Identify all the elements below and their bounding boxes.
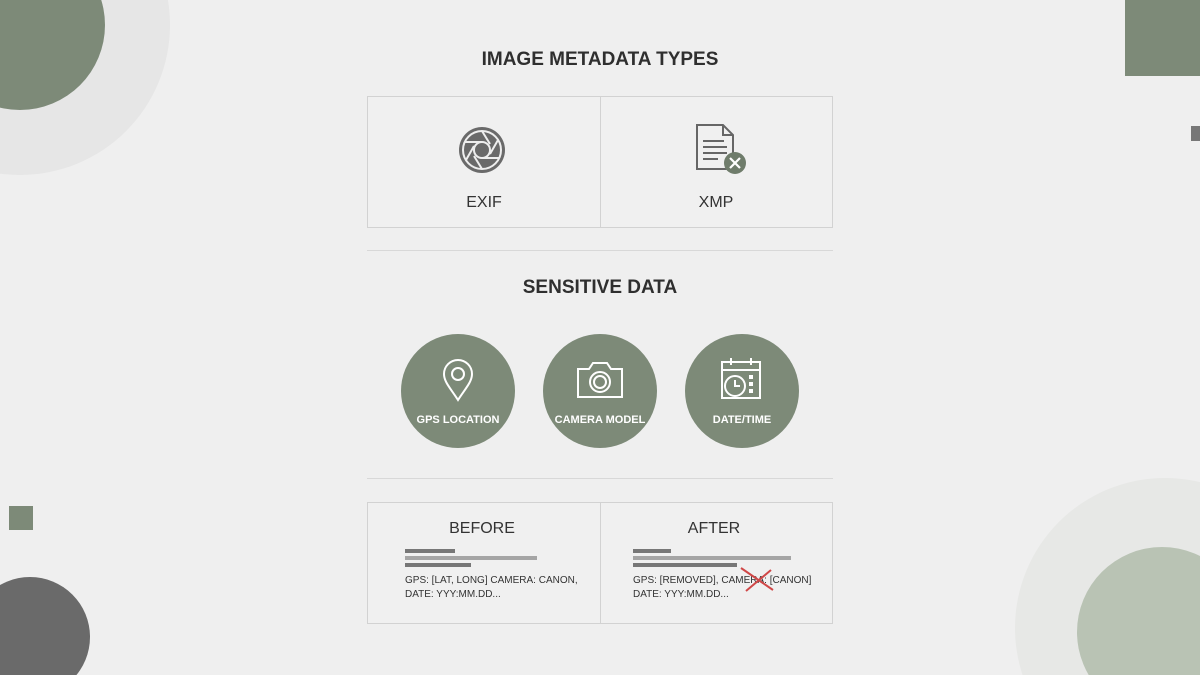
card: after: AFTER: [688, 520, 740, 537]
decoration: left green square: [9, 506, 33, 530]
card: EXIF: [368, 97, 601, 227]
icon circle: GPS location: GPS LOCATION: [417, 414, 499, 426]
card: before: BEFORE: [449, 520, 515, 537]
icon circle: date/time: DATE/TIME: [713, 414, 771, 426]
panel: before/after: [367, 502, 833, 624]
card: before: DATE: YYY:MM.DD...: [405, 589, 501, 600]
label: XMP: XMP: [699, 194, 733, 211]
icon circle: date/time: [685, 334, 799, 448]
decoration: bottom-right circle: [1077, 547, 1200, 675]
icon: document with x: [696, 124, 746, 174]
card: after: [633, 520, 811, 600]
icon circle: camera model: [543, 334, 657, 448]
card: before: [368, 503, 601, 623]
panel: metadata types: [367, 96, 833, 228]
card: XMP: [696, 124, 746, 211]
decoration: bottom-right ring: [1015, 478, 1200, 675]
icon: red cross-out: [740, 567, 774, 592]
decoration: small grey square: [1191, 126, 1200, 141]
decoration: bottom-left circle: [0, 577, 90, 675]
decoration: top-left circle: [0, 0, 105, 110]
icon: aperture: [459, 127, 505, 173]
title: sensitive data: SENSITIVE DATA: [523, 277, 677, 298]
card: after: GPS: [REMOVED], CAMERA: [CANON]: [633, 575, 811, 586]
decoration: top-right square: [1125, 0, 1200, 76]
icon circle: camera model: CAMERA MODEL: [555, 414, 645, 426]
icon circle: GPS location: [401, 334, 515, 448]
card: after: DATE: YYY:MM.DD...: [633, 589, 729, 600]
title: image metadata types: IMAGE METADATA TYPES: [482, 49, 718, 70]
card: before: GPS: [LAT, LONG] CAMERA: CANON,: [405, 575, 578, 586]
decoration: top-left ring: [0, 0, 170, 175]
label: EXIF: EXIF: [466, 194, 502, 211]
